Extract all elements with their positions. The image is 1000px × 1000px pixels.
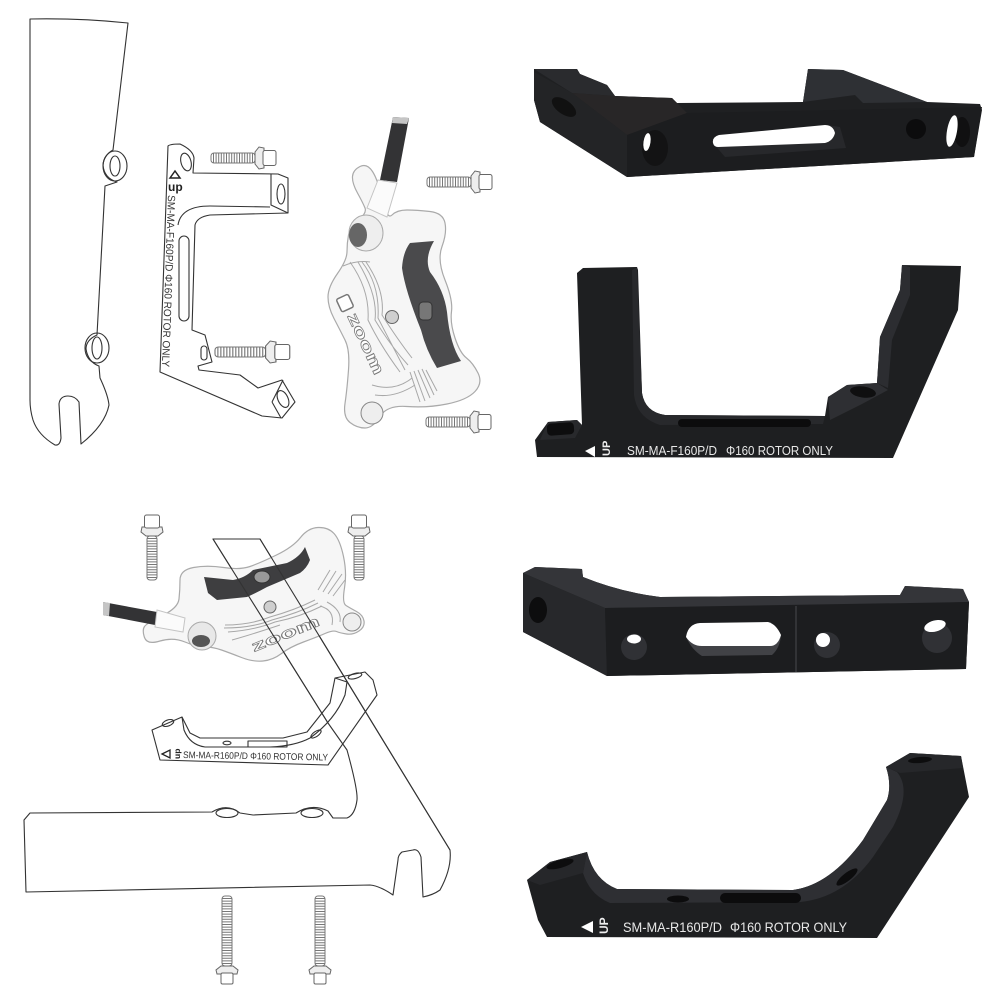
frame lines over caliper [213, 539, 450, 850]
bolt: bottom left long bolt [216, 896, 238, 984]
photo: front adapter, angled view [534, 69, 982, 177]
engraved marking: Φ160 ROTOR ONLY [726, 443, 833, 458]
rear adapter bracket sketch: up [172, 749, 182, 759]
engraved marking [581, 917, 848, 935]
photo: rear adapter, face view [527, 753, 969, 938]
front caliper sketch [328, 117, 480, 428]
front adapter bracket sketch: up [168, 180, 183, 194]
bolt: top left caliper bolt [141, 515, 163, 580]
engraved marking: UP [597, 917, 611, 934]
engraved marking: SM-MA-F160P/D [627, 443, 717, 458]
bolt: lower caliper bolt [426, 411, 491, 433]
bolt: top right caliper bolt [348, 515, 370, 580]
rear adapter bracket sketch [152, 672, 377, 765]
engraved marking: UP [601, 441, 613, 456]
caliper logo: zoom [249, 613, 322, 656]
rear adapter bracket sketch: SM-MA-R160P/D Φ160 ROTOR ONLY [183, 750, 329, 764]
engraved marking: SM-MA-R160P/D [623, 919, 722, 935]
photo: front adapter, face view [535, 265, 961, 458]
engraved marking [585, 441, 833, 458]
caliper logo: zoom [343, 311, 387, 378]
front adapter bracket sketch [159, 144, 295, 418]
bolt: bottom right long bolt [309, 896, 331, 984]
bolt: upper bracket bolt [211, 147, 276, 169]
photo: rear adapter, angled view [523, 567, 969, 676]
bolt: lower bracket bolt [215, 341, 290, 363]
panel: front fork installation sketch [30, 19, 492, 445]
engraved marking: Φ160 ROTOR ONLY [730, 919, 848, 935]
panel: rear frame installation sketch [24, 515, 450, 984]
rear caliper sketch [103, 527, 364, 661]
front adapter bracket sketch: SM-MA-F160P/D Φ160 ROTOR ONLY [159, 195, 177, 367]
bolt: upper caliper bolt [427, 171, 492, 193]
front fork outline [30, 19, 128, 445]
rear frame outline [24, 539, 450, 897]
